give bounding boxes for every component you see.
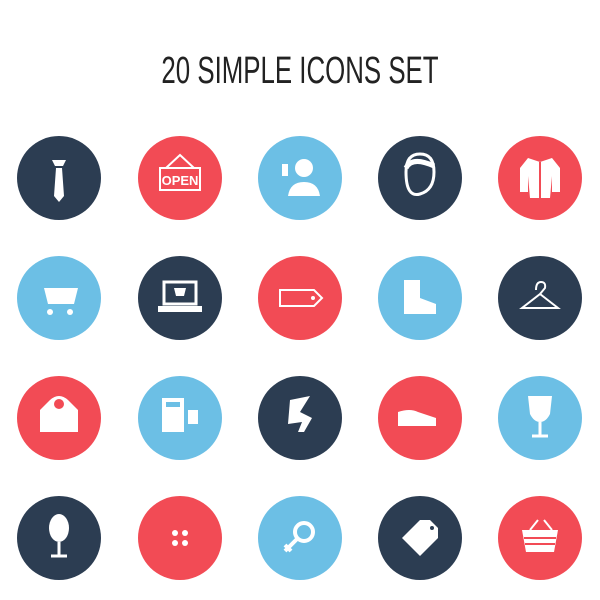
icon: button xyxy=(138,496,222,580)
icon: laptop shop xyxy=(138,256,222,340)
icon: support person xyxy=(258,136,342,220)
icon: calculator xyxy=(138,376,222,460)
icon: price tag xyxy=(378,496,462,580)
icon: mirror xyxy=(17,496,101,580)
title: 20 SIMPLE ICONS SET xyxy=(161,50,439,92)
icon: shoe xyxy=(378,376,462,460)
icon: open sign xyxy=(138,136,222,220)
icon: high heel xyxy=(258,376,342,460)
icon: fragile glass xyxy=(498,376,582,460)
icon: hanger xyxy=(498,256,582,340)
icon: boot xyxy=(378,256,462,340)
icon: tie xyxy=(17,136,101,220)
icon: tag label xyxy=(258,256,342,340)
icon: cart xyxy=(17,256,101,340)
icon: hoodie xyxy=(17,376,101,460)
icon: man head xyxy=(378,136,462,220)
icon: basket xyxy=(498,496,582,580)
icon: open sign: OPEN xyxy=(162,173,198,188)
icon: jacket xyxy=(498,136,582,220)
icon: female symbol xyxy=(258,496,342,580)
